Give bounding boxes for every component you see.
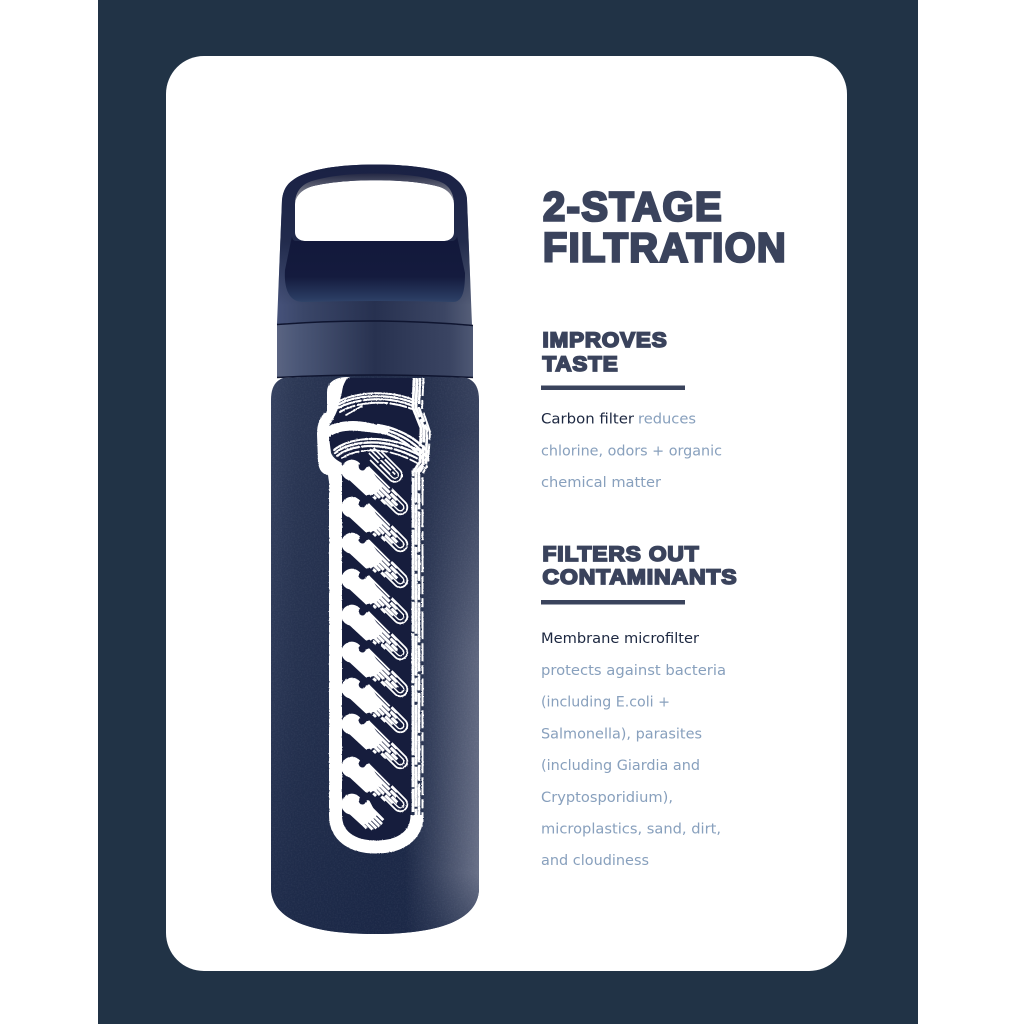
body text: carbon filter: reduces [638,412,696,428]
illustration: water bottle [271,164,479,936]
coil 2 [337,489,410,562]
body text: carbon filter: Carbon filter [541,412,634,428]
filter interior [326,378,422,841]
coil 5 [337,597,410,670]
handle recess [285,236,465,302]
bottle collar [277,321,473,378]
white card [166,56,847,971]
bottle lid with carry handle [277,164,472,325]
coil 7 [337,670,410,743]
coil 6 [337,634,410,707]
title: 2-STAGE [543,184,723,230]
body text: carbon filter: chlorine, odors + organic [541,444,722,460]
title [543,184,787,270]
divider rule [541,386,685,390]
title: FILTRATION [543,224,787,270]
filter right edge brush [413,378,430,822]
handle inner shading [295,174,454,202]
filter top brush arcs [334,393,428,463]
body text: membrane microfilter: (including E.coli + [541,694,670,710]
body text: membrane microfilter [541,631,726,869]
heading: improves taste [542,329,668,376]
body text: membrane microfilter: Salmonella), parasites [541,726,702,742]
coil 3 [337,525,410,598]
heading: filters out contaminants: CONTAMINANTS [542,566,738,589]
coil 9 [337,749,410,822]
handle opening [295,180,454,241]
short top coil [364,444,405,485]
body text: membrane microfilter: microplastics, sand, dirt, [541,822,721,838]
body text: membrane microfilter: Cryptosporidium), [541,790,673,806]
bottle body [271,372,479,936]
seam lines [277,321,473,378]
heading: improves taste: IMPROVES [542,329,668,352]
coil 10 short [337,786,388,837]
filter shoulder and solid arc [317,377,390,482]
divider rule [541,600,685,604]
filter outline left and bottom [336,470,417,847]
body text: membrane microfilter: and cloudiness [541,853,649,869]
filter coils [337,444,410,837]
body text: membrane microfilter: protects against bacteria [541,663,726,679]
body text: membrane microfilter: (including Giardia and [541,758,700,774]
heading: filters out contaminants [542,543,738,589]
heading: improves taste: TASTE [542,353,618,376]
filter diagram [317,377,430,847]
body text: carbon filter: chemical matter [541,475,661,491]
coil 8 [337,706,410,779]
body text: membrane microfilter: Membrane microfilter [541,631,699,647]
section: improves taste [541,329,722,491]
coil 1 [337,452,410,525]
section: filters out contaminants [541,543,738,869]
coil 4 [337,561,410,634]
heading: filters out contaminants: FILTERS OUT [542,543,700,566]
body text: carbon filter [541,412,722,491]
